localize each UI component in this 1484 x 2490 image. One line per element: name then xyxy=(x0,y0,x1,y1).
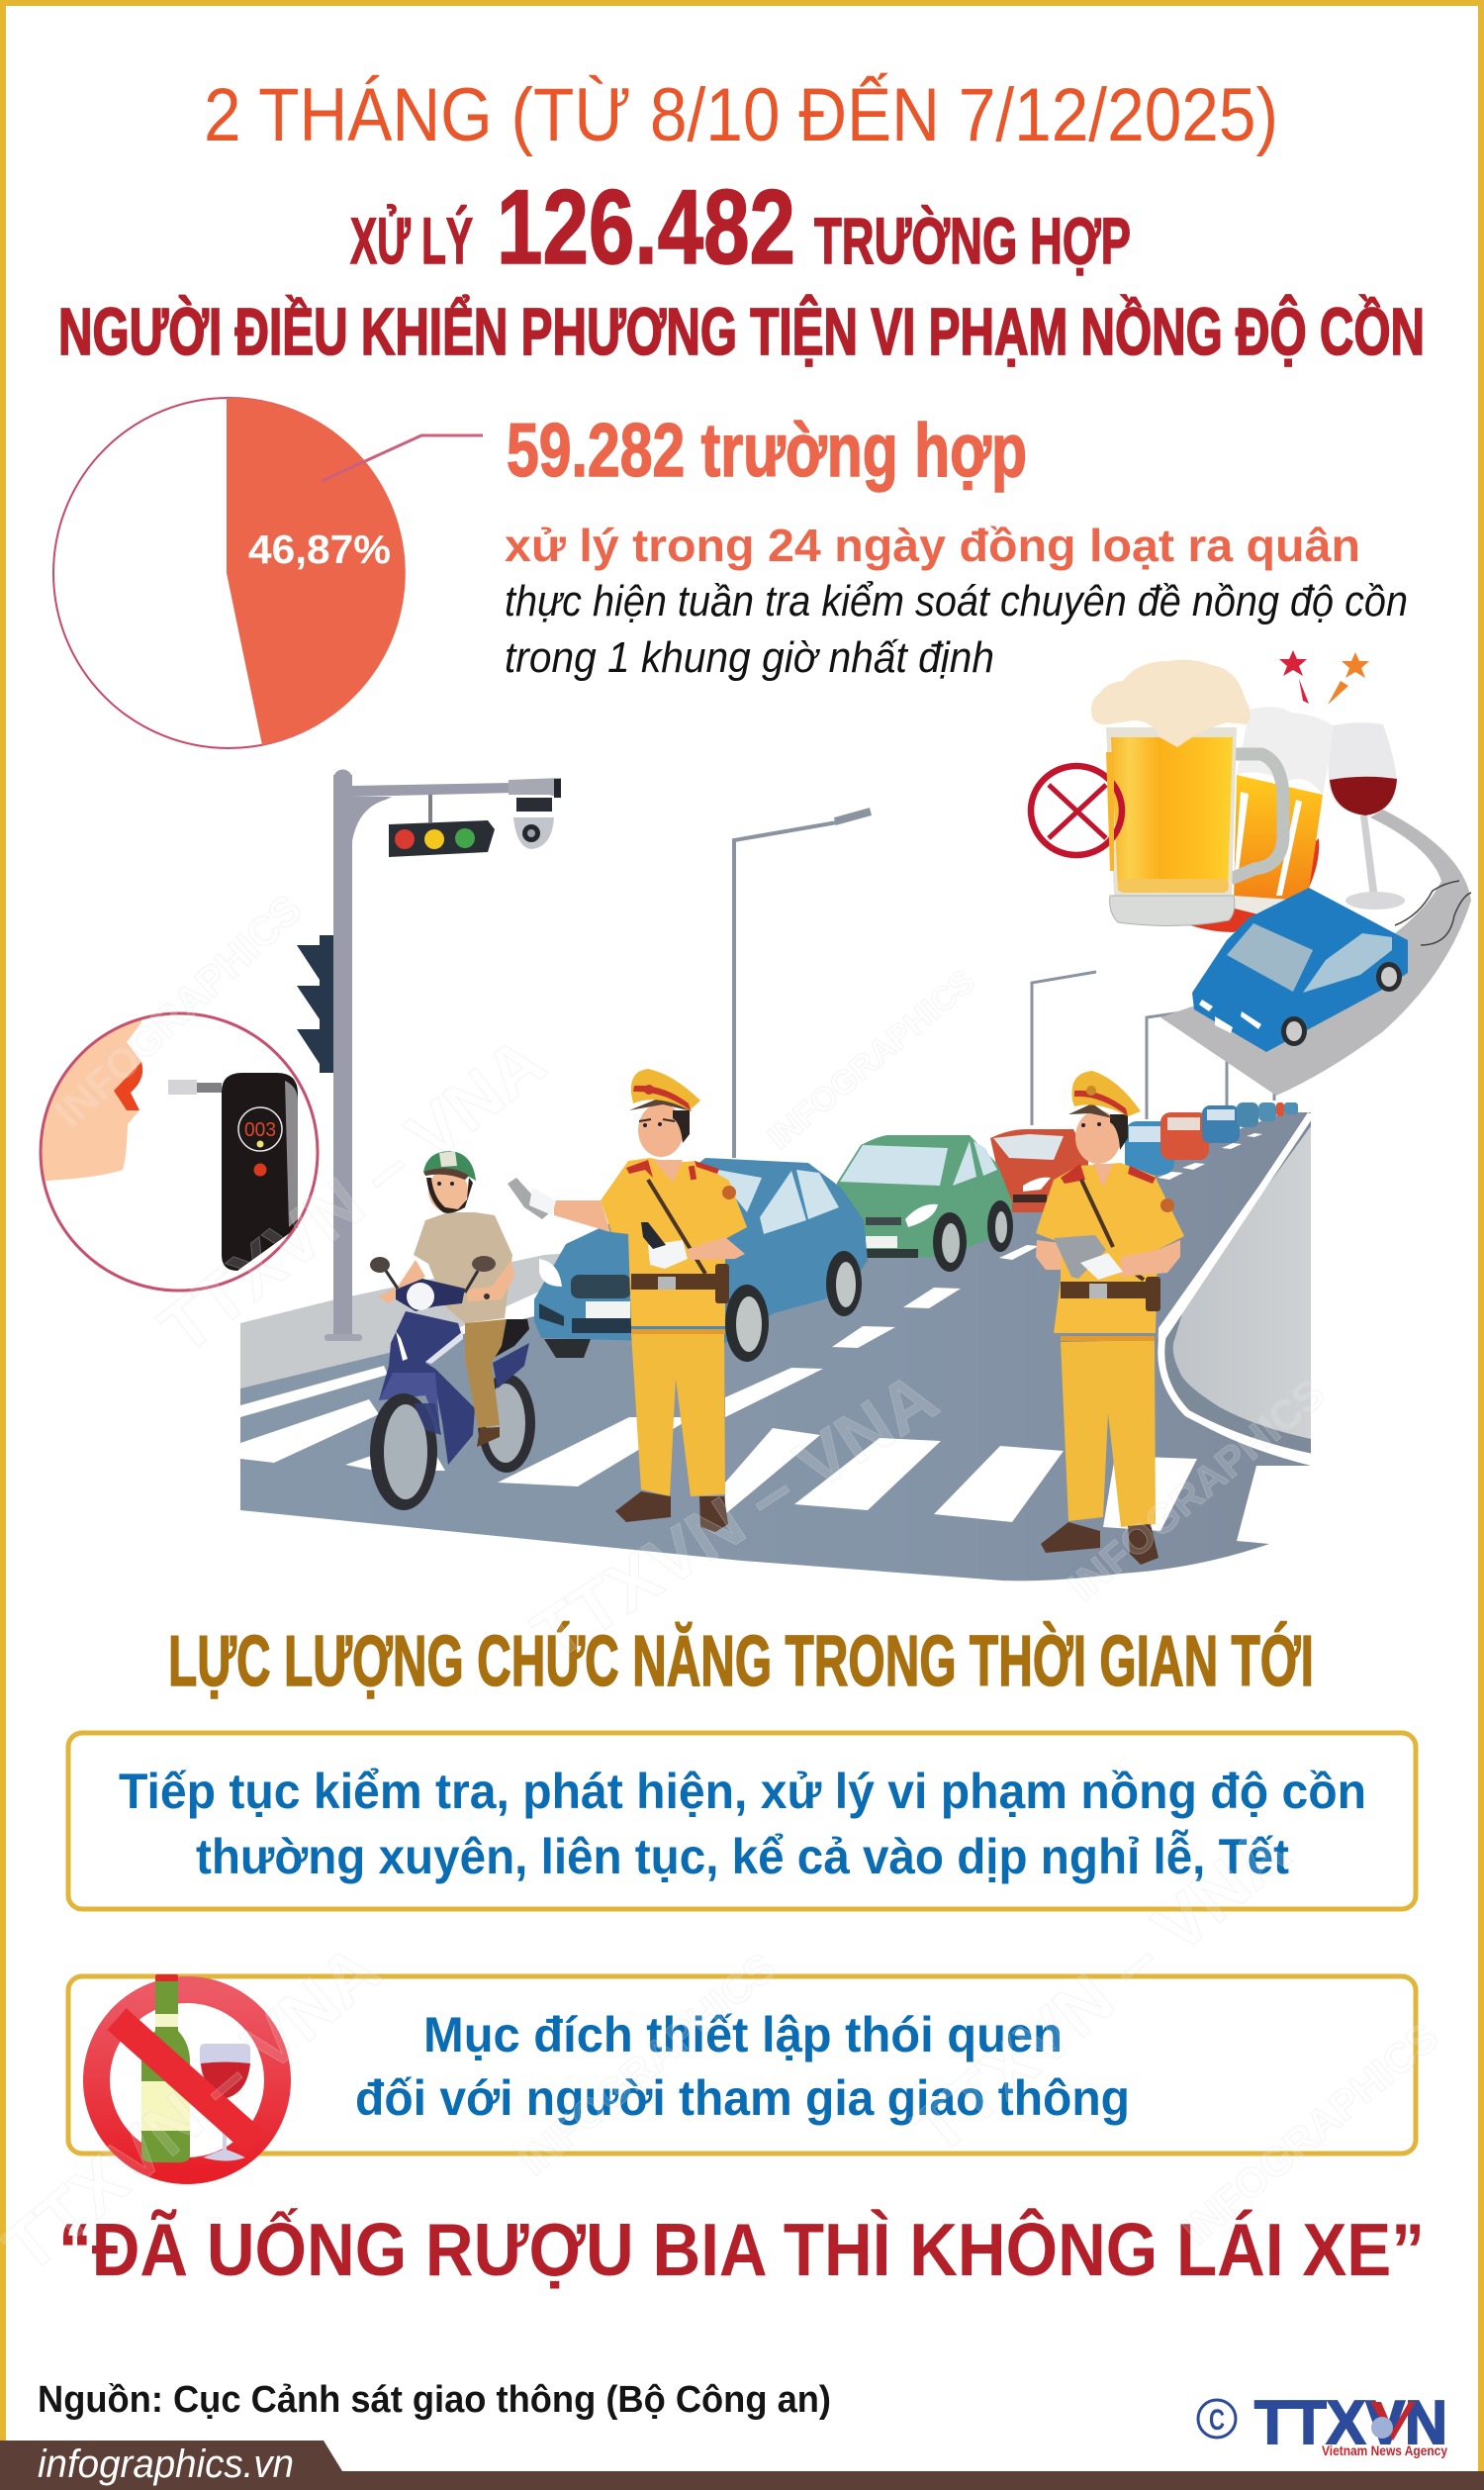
mirrors and handlebar xyxy=(370,1256,496,1311)
bike seat xyxy=(492,1319,529,1359)
footer bar: infographics.vn xyxy=(38,2442,294,2486)
slash xyxy=(117,2019,255,2143)
leader line xyxy=(322,435,483,481)
panel: continuing enforcement: thường xuyên, liên tục, kể cả vào dịp nghỉ lễ, Tết xyxy=(196,1829,1289,1884)
blue car on winding road xyxy=(1192,888,1408,1052)
watermarks: TTXVN – VNA xyxy=(899,1811,1305,2169)
icon: no alcohol xyxy=(97,1974,277,2171)
tester body xyxy=(222,1073,298,1271)
bottle xyxy=(141,1979,190,2162)
glass xyxy=(200,2044,250,2161)
front wheel xyxy=(370,1393,437,1510)
panel: purpose: Mục đích thiết lập thói quen xyxy=(423,2007,1063,2062)
distant cars xyxy=(1125,1102,1298,1175)
title: headline count: XỬ LÝ xyxy=(350,204,473,277)
face xyxy=(42,1019,141,1182)
watermarks: INFOGRAPHICS xyxy=(1060,1370,1333,1610)
stat note: thực hiện tuần tra kiểm soát chuyên đề nồng độ cồn xyxy=(505,577,1408,625)
rear bodywork xyxy=(493,1343,529,1389)
watermarks: TTXVN – VNA xyxy=(519,1357,951,1676)
road barrier xyxy=(1160,1114,1311,1457)
footer bar xyxy=(0,2441,1484,2490)
officer with tablet xyxy=(1036,1071,1184,1565)
panel: purpose: đối với người tham gia giao thông xyxy=(355,2070,1130,2126)
title: headline count xyxy=(350,167,1131,286)
traffic light xyxy=(389,820,495,857)
watermarks: INFOGRAPHICS xyxy=(510,1944,784,2184)
officer with breath tester xyxy=(508,1069,747,1532)
road xyxy=(240,1112,1311,1580)
street lamps xyxy=(734,812,1288,1158)
stat note: trong 1 khung giờ nhất định xyxy=(505,633,994,682)
title: headline count: 126.482 xyxy=(497,167,795,286)
watermarks: TTXVN – VNA xyxy=(146,1021,560,1370)
pie chart: 46,87%: 46,87% xyxy=(248,527,391,572)
pie chart: 46,87% xyxy=(53,398,406,748)
title: period: 2 THÁNG (TỪ 8/10 ĐẾN 7/12/2025) xyxy=(204,73,1278,157)
breathalyzer inset xyxy=(30,1009,318,1291)
rider torso xyxy=(414,1212,512,1323)
watermarks: INFOGRAPHICS xyxy=(46,886,311,1137)
winding road xyxy=(1160,810,1471,1096)
motorbike and rider xyxy=(370,1151,535,1510)
rider head xyxy=(428,1169,468,1212)
sidewalk xyxy=(240,1249,633,1395)
crosswalk stripes xyxy=(240,1366,1197,1531)
panel: continuing enforcement: Tiếp tục kiểm tra, phát hiện, xử lý vi phạm nồng độ cồn xyxy=(119,1764,1366,1819)
watermarks xyxy=(0,886,1446,2288)
red splash xyxy=(1190,838,1319,932)
tester body: 003 xyxy=(244,1119,276,1141)
green car xyxy=(837,1135,1013,1272)
title: headline count: TRƯỜNG HỢP xyxy=(814,204,1131,277)
logo: TTXVN: C xyxy=(1209,2404,1225,2437)
stat: 59.282 cases: 59.282 trường hợp xyxy=(507,409,1027,493)
tester nozzle xyxy=(168,1080,222,1095)
logo: TTXVN: TTXVN xyxy=(1254,2389,1447,2457)
watermarks: INFOGRAPHICS xyxy=(1173,2013,1446,2253)
ring xyxy=(97,1989,277,2171)
rider legs xyxy=(465,1319,507,1428)
front shield xyxy=(379,1311,475,1465)
illustration: drunk driving vignette xyxy=(1031,650,1471,1096)
second beer xyxy=(1234,707,1333,916)
lips xyxy=(114,1062,142,1110)
rider arms xyxy=(378,1260,425,1303)
red car xyxy=(990,1129,1088,1212)
watermarks: INFOGRAPHICS xyxy=(761,962,982,1157)
beer mug xyxy=(1091,660,1283,926)
stat description: xử lý trong 24 ngày đồng loạt ra quân xyxy=(505,520,1360,571)
illustration: traffic checkpoint xyxy=(240,770,1311,1580)
traffic light pole xyxy=(297,770,561,1341)
rear wheel xyxy=(478,1374,535,1473)
panel: purpose xyxy=(68,1976,1416,2154)
panel: continuing enforcement xyxy=(68,1733,1416,1909)
blue car xyxy=(534,1158,868,1362)
side signal xyxy=(297,935,333,1073)
no-drinking cross xyxy=(1031,752,1122,871)
camera xyxy=(509,778,561,849)
logo: TTXVN: Vietnam News Agency xyxy=(1322,2442,1447,2458)
stat note xyxy=(505,577,1408,682)
lane dashes xyxy=(832,1133,1262,1348)
source: Nguồn: Cục Cảnh sát giao thông (Bộ Công an) xyxy=(38,2379,831,2421)
watermarks: TTXVN – VNA xyxy=(0,1930,395,2288)
wine glass xyxy=(1329,722,1405,910)
stars xyxy=(1279,650,1369,705)
